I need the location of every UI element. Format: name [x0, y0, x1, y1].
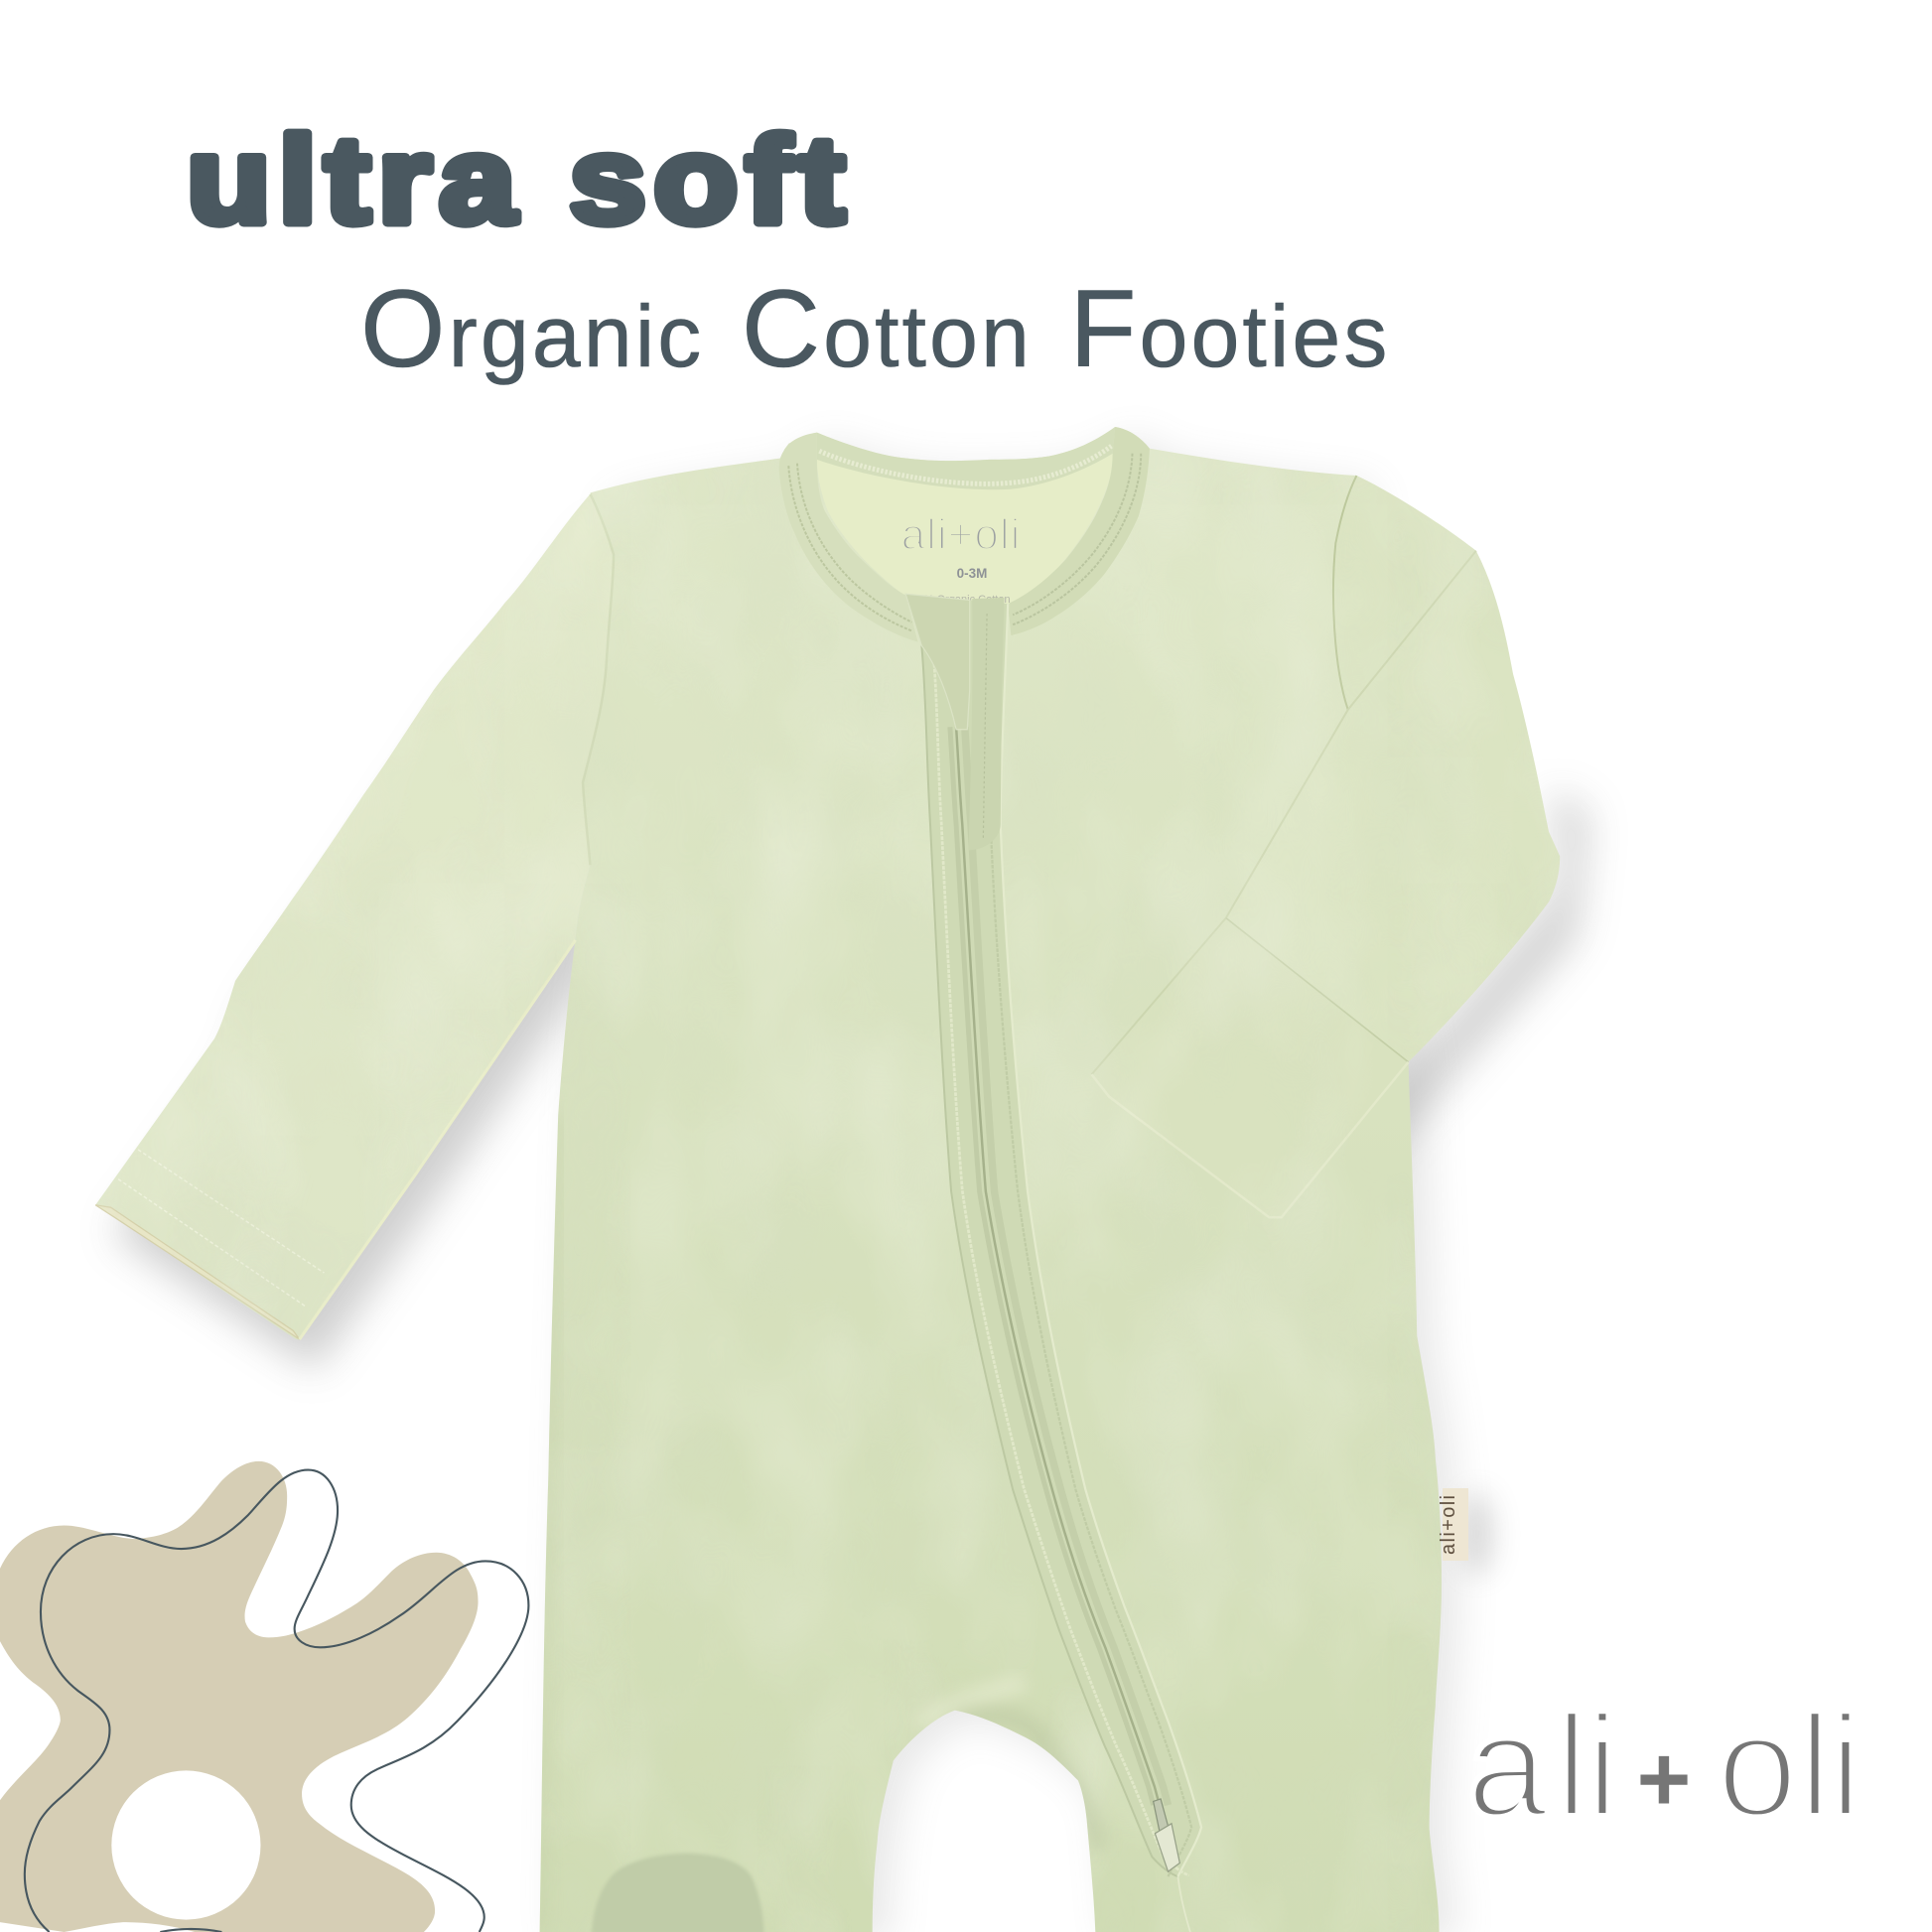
back collar band: [817, 427, 1115, 489]
logo letters: ali: ali: [1466, 1685, 1618, 1847]
logo letters: oli: oli: [1717, 1685, 1862, 1847]
zipper placket: [905, 594, 1201, 1876]
placket flap: [905, 594, 970, 730]
garment drop shadows: [113, 437, 1589, 1932]
brand logo: ali+oli: [1466, 1685, 1862, 1847]
front right collar stitching: [1013, 454, 1141, 624]
shoulder seam: [583, 494, 614, 865]
side woven tag: [1438, 1488, 1493, 1576]
cuff edge: [1092, 1062, 1409, 1217]
collar: [779, 427, 1150, 642]
sleeve fold line: [1092, 551, 1476, 1074]
cuff fold: [1092, 918, 1409, 1217]
garment main body: [540, 427, 1442, 1932]
front right collar band: [1008, 427, 1150, 635]
logo plus sign: +: [1637, 1726, 1691, 1831]
front left collar stitching: [788, 464, 911, 630]
neck label: fabric line: 100% Organic Cotton: [905, 594, 1011, 606]
cuff seam line: [1226, 918, 1409, 1062]
placket base: [905, 594, 1201, 1876]
zipper pull: [1154, 1799, 1179, 1871]
armhole seam: [1333, 476, 1356, 710]
inner neck label area: [817, 454, 1113, 606]
blob: dark outline curve: [25, 1470, 528, 1932]
decorative blob with outline: [0, 1461, 528, 1932]
tag shadow: [1461, 1492, 1493, 1576]
right sleeve: [1092, 476, 1560, 1217]
fabric mottling and folds: [99, 484, 1476, 1932]
leg seam below zipper: [1177, 1876, 1190, 1932]
subtitle: Organic Cotton Footies: Organic Cotton Footies: [360, 268, 1390, 390]
tag text: ali+oli: [1438, 1495, 1459, 1555]
front left collar band: [779, 433, 918, 642]
right zipper strip top: [968, 598, 1004, 850]
title: ultra soft: ultra soft: [187, 111, 845, 248]
neck label: brand: ali+oli: [901, 510, 1021, 559]
sleeve hem stitches: [118, 1150, 324, 1308]
left sleeve: [95, 494, 614, 1339]
tag cloth: [1443, 1488, 1468, 1561]
blob: beige organic shape: [0, 1461, 479, 1932]
garment: green organic cotton footie: [0, 419, 1601, 1932]
zipper gap: [956, 727, 1160, 1805]
sleeve lower edge: [300, 940, 576, 1339]
sleeve hem strip: [95, 1205, 300, 1339]
back collar stitching: [819, 446, 1111, 483]
placket seams: [921, 604, 1201, 1876]
neck label: size: 0-3M: [957, 566, 987, 581]
left foot: [592, 1854, 763, 1932]
